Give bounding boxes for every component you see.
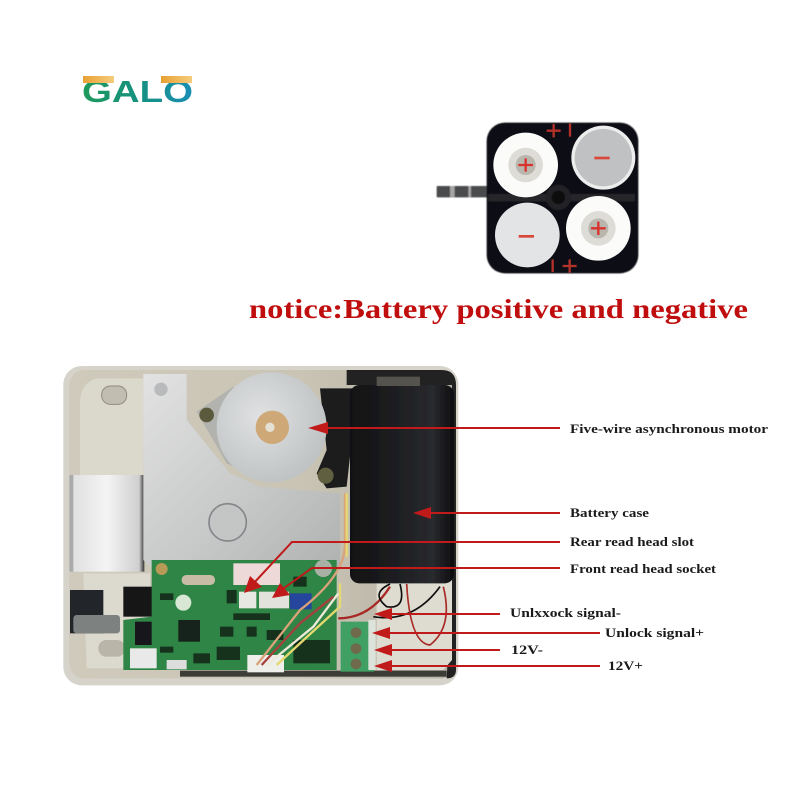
label: battery case: Battery case [570, 506, 650, 520]
logo: GALO: GALO [82, 74, 193, 109]
motor connector [317, 388, 353, 488]
circuit board [123, 560, 337, 670]
dark bottom edge [180, 671, 447, 677]
motor [217, 372, 327, 482]
silver plate [143, 374, 340, 567]
cell bottom left, negative [495, 203, 560, 267]
arrow: 12V minus [374, 644, 500, 656]
notice heading: notice:Battery positive and negative [249, 294, 748, 324]
label: unlock signal plus: Unlock signal+ [605, 626, 704, 640]
battery holder photo [437, 123, 638, 273]
arrow: unlock signal plus [372, 627, 600, 639]
polarity marks bottom [553, 259, 577, 273]
cell bottom right, positive [566, 196, 631, 261]
board sockets [239, 592, 256, 608]
lock casing [63, 366, 458, 685]
plate rivet [209, 504, 246, 541]
dark inner wall, top right [347, 370, 456, 678]
arrows [244, 422, 600, 672]
motor bracket [197, 387, 260, 480]
polarity marks top [547, 123, 570, 137]
cylinder sensor [70, 590, 120, 633]
label: 12V minus: 12V- [511, 643, 543, 657]
cell top right, negative [571, 126, 635, 190]
arrow: 12V plus [374, 660, 600, 672]
lock photo [63, 366, 458, 685]
left bracket [80, 378, 143, 477]
arrow: front read head socket [272, 568, 560, 598]
arrow: unlock signal minus [374, 608, 500, 620]
label: unlock signal minus: Unlxxock signal- [510, 606, 621, 620]
motor wires [257, 493, 446, 665]
cell top left, positive [493, 133, 558, 197]
arrow: battery case [413, 507, 560, 519]
silver tray under battery [347, 580, 452, 670]
arrow: motor [308, 422, 560, 434]
label: front read head socket: Front read head socket [570, 562, 717, 576]
label: 12V plus: 12V+ [608, 659, 643, 673]
arrow: rear read head slot [244, 542, 560, 593]
latch bolt [69, 475, 144, 572]
battery case [350, 385, 454, 583]
terminal block [341, 620, 376, 672]
DIP chip [123, 587, 153, 617]
label: rear read head slot: Rear read head slot [570, 535, 695, 549]
holder body [487, 123, 638, 273]
holder tab [437, 186, 488, 197]
lower bracket [83, 573, 150, 668]
label: motor: Five-wire asynchronous motor [570, 422, 769, 436]
